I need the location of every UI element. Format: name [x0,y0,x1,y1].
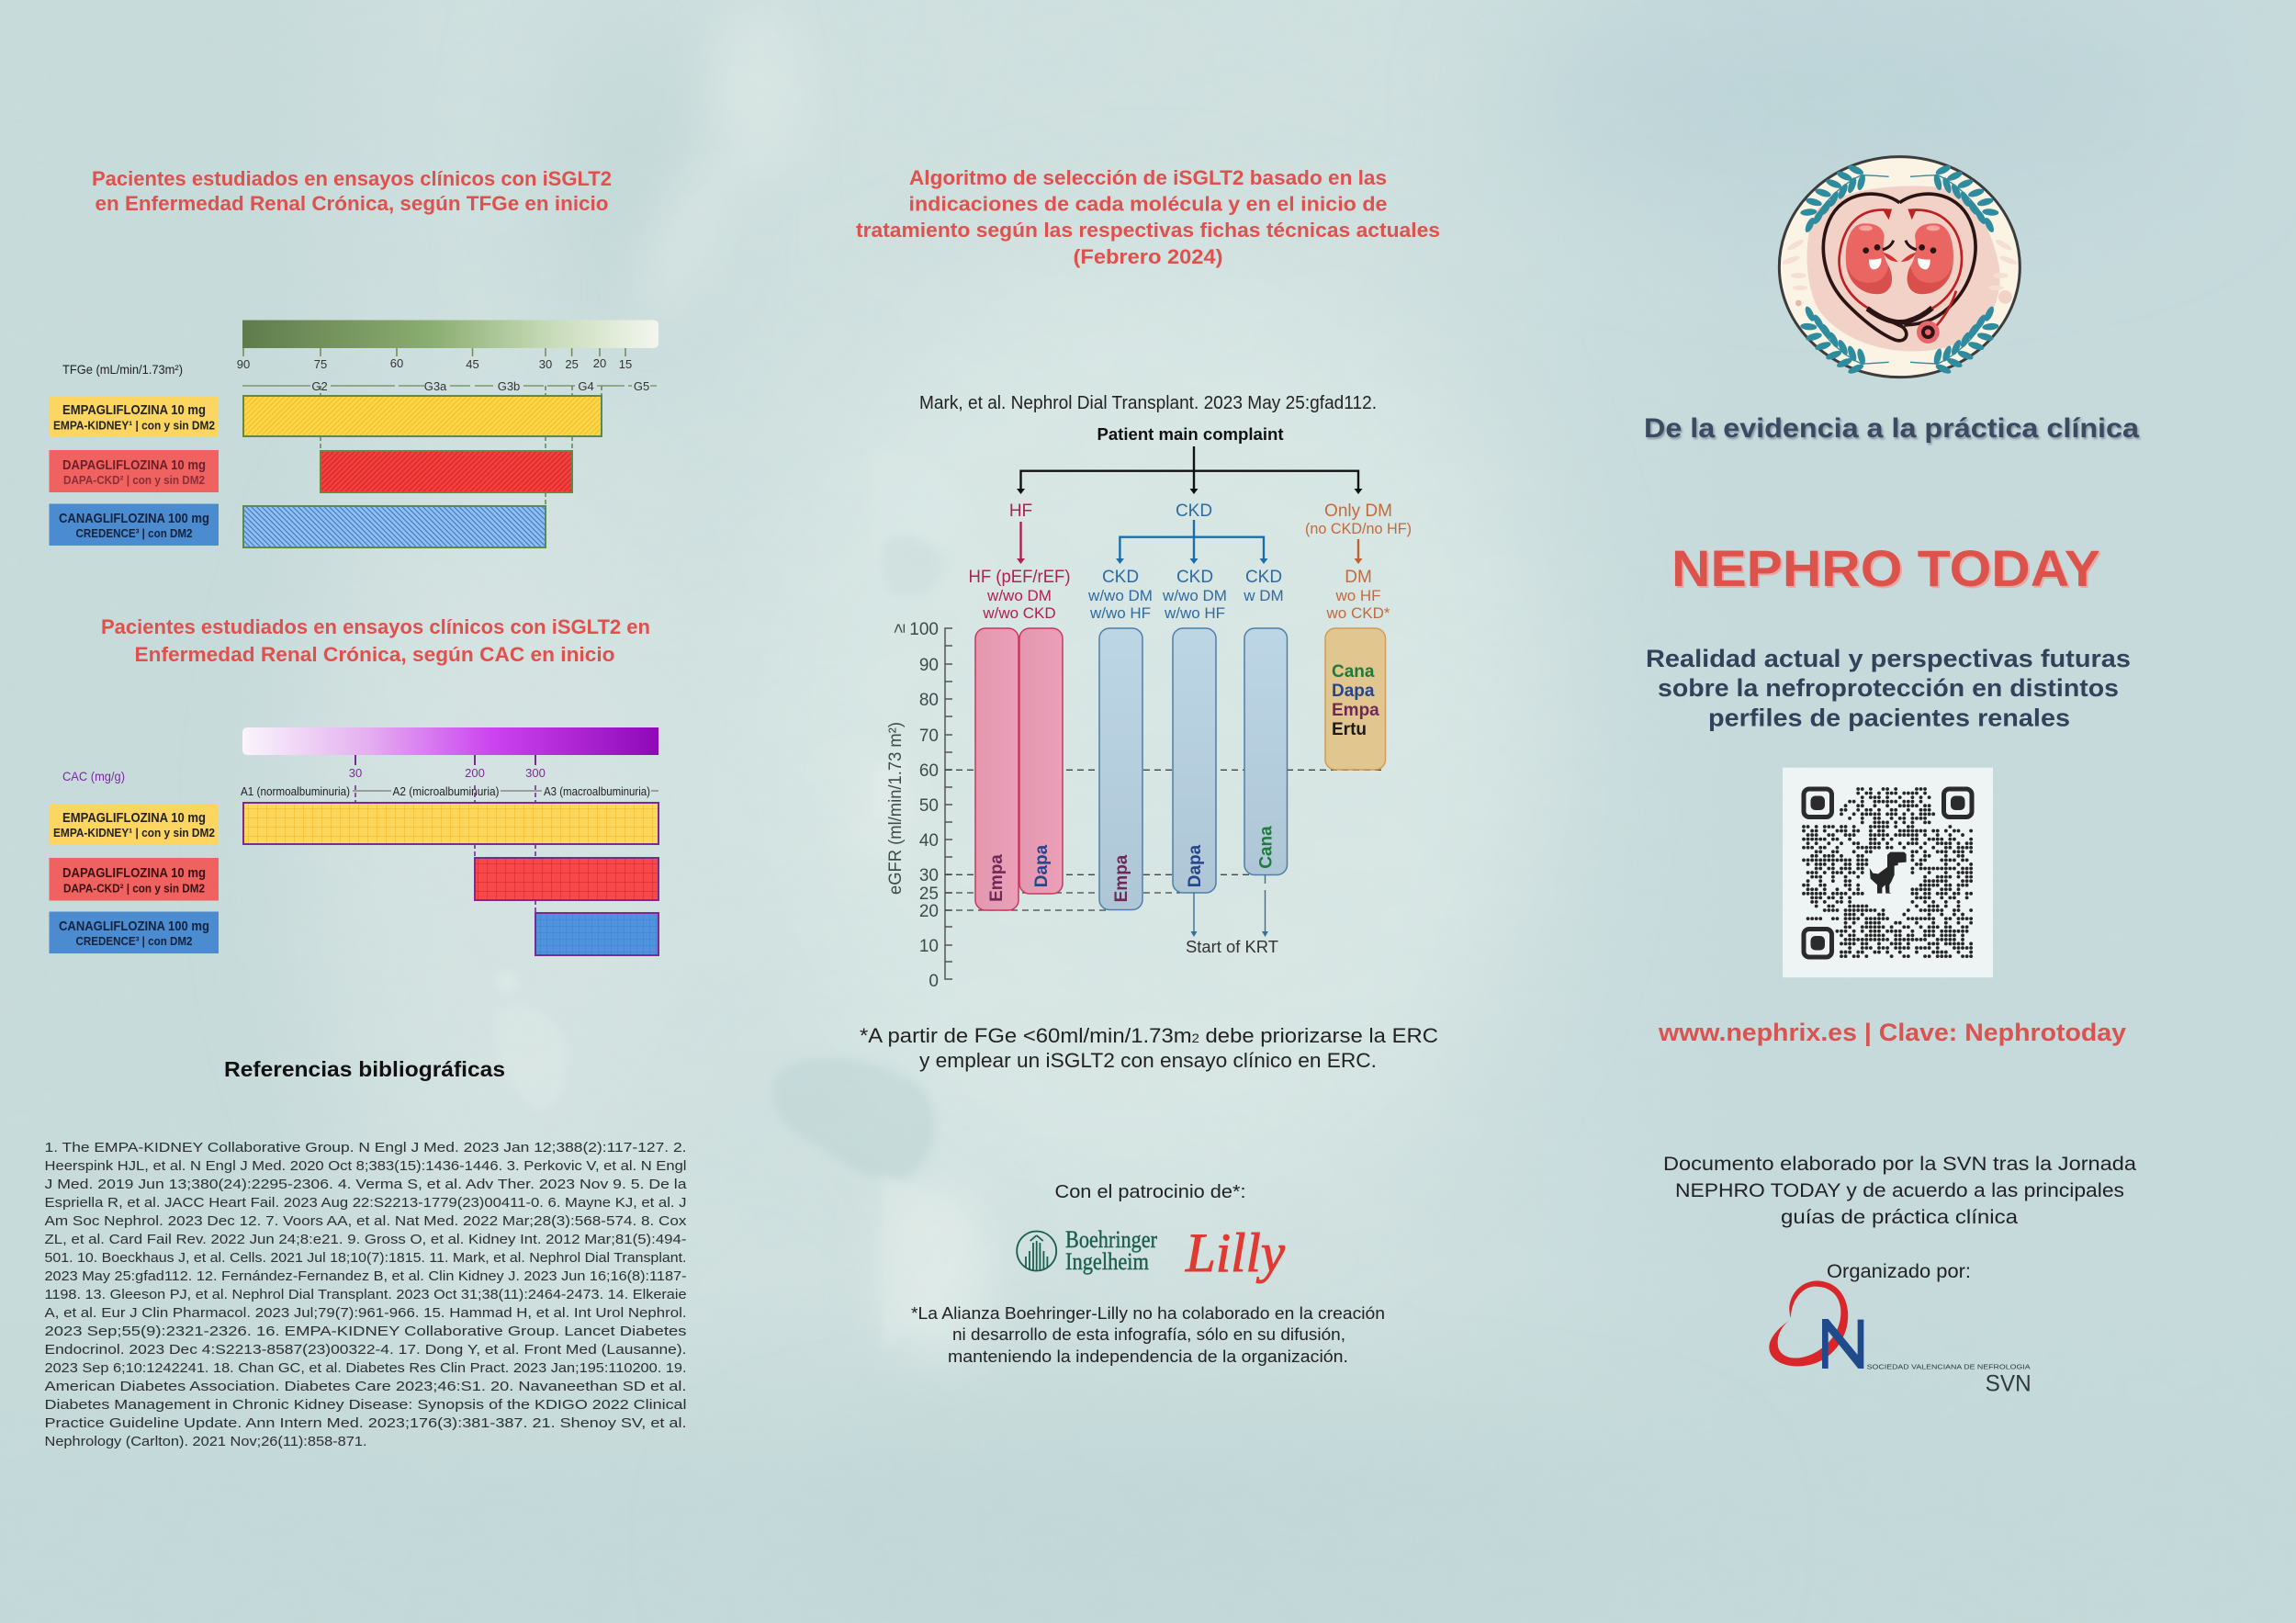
y axis: 25 [919,885,939,904]
title: TFGe chart: Pacientes estudiados en ensayos clínicos con iSGLT2 [92,167,612,190]
branch CKD [1087,502,1284,622]
label: start of KRT: Start of KRT [1186,938,1278,956]
text block: references [44,1140,687,1449]
flowchart: patient main complaint [968,424,1412,622]
heading: references: Referencias bibliográficas [224,1057,505,1081]
G stages: G4 [578,379,594,393]
axis ticks and numbers: 20 [593,356,606,370]
text block: references: 2023 May 25:gfad112. 12. Fernández-Fernandez B, et al. Clin Kidney J. 2023 Jun 16;16(8):1187- [44,1268,687,1284]
branch only DM: DM [1345,568,1372,587]
title: algorithm [856,166,1440,268]
branch CKD: CKD [1245,568,1282,587]
title: TFGe chart [92,167,612,215]
text block: references: 2023 Sep 6;10:1242241. 18. Chan GC, et al. Diabetes Res Clin Pract. 2023 Jan;195:110200. 19. [44,1360,687,1376]
label: empagliflozina: EMPA-KIDNEY¹ | con y sin DM2 [53,826,215,840]
QR dinosaur [1870,852,1907,894]
note: FGe priority: y emplear un iSGLT2 con ensayo clínico en ERC. [919,1049,1377,1072]
label: canagliflozina: CANAGLIFLOZINA 100 mg [59,511,209,526]
axis ticks and numbers: 75 [314,357,327,371]
blue N [1822,1319,1863,1369]
sponsor disclaimer: *La Alianza Boehringer-Lilly no ha colaborado en la creación [911,1303,1385,1323]
axis ticks and numbers: 60 [390,356,403,370]
description: perfiles de pacientes renales [1708,704,2070,731]
text block: references: Diabetes Management in Chronic Kidney Disease: Synopsis of the KDIGO 2022 Clinical [44,1397,687,1413]
branch CKD: w/wo DM [1162,587,1227,604]
root label: Patient main complaint [1097,424,1284,444]
branch CKD: w/wo HF [1089,604,1151,622]
organizer label: Organizado por: [1827,1260,1971,1282]
label: dapagliflozina: DAPA-CKD² | con y sin DM2 [63,473,205,487]
branch HF: HF [1009,502,1032,521]
pink blob [1806,186,2000,351]
QR finder patterns [1804,789,1972,957]
society name: SOCIEDAD VALENCIANA DE NEFROLOGIA [1867,1363,2031,1371]
bar: HF Dapa: Dapa [1032,844,1052,887]
document note: guías de práctica clínica [1781,1206,2018,1228]
title: algorithm: tratamiento según las respectivas fichas técnicas actuales [856,219,1440,242]
G stages [242,379,657,506]
branch only DM [1305,502,1412,622]
axis ticks and numbers: 300 [525,766,546,780]
title: algorithm: (Febrero 2024) [1073,245,1223,268]
A stages: A2 (microalbuminuria) [393,784,500,798]
bar: empagliflozina [243,396,602,436]
title: algorithm: indicaciones de cada molécula y en el inicio de [909,193,1387,215]
bar: CKD Cana: Cana [1256,826,1277,869]
y axis: 40 [919,831,939,851]
text block: references: American Diabetes Association. Diabetes Care 2023;46:S1. 20. Navaneethan SD et al. [44,1379,687,1394]
y axis: 80 [919,691,939,710]
bar: CKD Empa: Empa [1112,854,1131,902]
bar: HF Empa: Empa [987,854,1007,902]
text block: references: Endocrinol. 2023 Dec 4:S2213-8587(23)00322-4. 17. Dong Y, et al. Front Med (Lausanne). [44,1342,687,1358]
bar: DM: Ertu [1332,720,1367,739]
y axis [886,620,952,991]
bar: DM: Cana [1332,662,1375,682]
QR modules [1804,789,1971,956]
badge disc [1779,157,2020,378]
G stages: G2 [311,379,328,393]
text block: references: A, et al. Eur J Clin Pharmacol. 2023 Jul;79(7):961-966. 15. Hammad H, et al. Int Urol Nephrol. [44,1305,687,1321]
arrows to KRT [1190,874,1268,937]
axis ticks and numbers: 90 [237,357,250,371]
faded laurels [1782,238,2018,306]
label: empagliflozina: EMPAGLIFLOZINA 10 mg [62,402,206,418]
title: TFGe chart: en Enfermedad Renal Crónica, según TFGe en inicio [96,192,608,215]
branch only DM: Only DM [1324,502,1392,521]
label: empagliflozina [50,397,219,437]
A stages [241,784,658,913]
axis ticks and numbers: 200 [465,766,485,780]
description: sobre la nefroprotección en distintos [1658,674,2119,702]
bar: dapagliflozina [321,451,572,492]
label: canagliflozina: CANAGLIFLOZINA 100 mg [59,919,209,934]
gradient scale green [242,320,658,348]
logo: SVN [1769,1280,2032,1396]
bar: canagliflozina [243,506,546,547]
logo: kidneys heart stethoscope [1779,157,2020,378]
document note: NEPHRO TODAY y de acuerdo a las principales [1675,1179,2124,1201]
label: empagliflozina: EMPAGLIFLOZINA 10 mg [62,810,206,826]
branch CKD: w DM [1243,587,1284,604]
text block: references: 2023 Sep;55(9):2321-2326. 16. EMPA-KIDNEY Collaborative Group. Lancet Diabetes [44,1324,687,1339]
heart tube [1823,194,1907,341]
text block: references: ZL, et al. Card Fail Rev. 2022 Jun 24;8:e21. 9. Gross O, et al. Kidney Int. 2012 Mar;81(5):494- [44,1232,687,1247]
label: canagliflozina [50,503,219,546]
branch only DM: (no CKD/no HF) [1305,521,1412,537]
branch HF: HF (pEF/rEF) [968,568,1071,587]
description: Realidad actual y perspectivas futuras [1646,645,2131,672]
branch HF: w/wo CKD [982,604,1056,622]
y axis: 10 [919,937,939,956]
threshold dashes [945,770,1385,910]
gradient scale purple [242,727,658,755]
axis label: CAC (mg/g) [62,769,125,783]
chart: CAC bars [50,727,658,955]
sponsor disclaimer: ni desarrollo de esta infografía, sólo en su difusión, [952,1324,1345,1344]
axis ticks and numbers [237,348,632,371]
text block: references: Heerspink HJL, et al. N Engl J Med. 2020 Oct 8;383(15):1436-1446. 3. Perkovic V, et al. N Engl [44,1158,686,1174]
label: dapagliflozina: DAPA-CKD² | con y sin DM2 [63,882,205,895]
title: CAC chart: Enfermedad Renal Crónica, según CAC en inicio [134,643,615,666]
website and key: www.nephrix.es | Clave: Nephrotoday [1658,1019,2126,1046]
logo: Boehringer Ingelheim [1017,1226,1157,1275]
axis label: TFGe (mL/min/1.73m²) [62,362,183,377]
sponsor label: Con el patrocinio de*: [1054,1182,1245,1202]
description [1646,645,2131,731]
chest piece [1917,321,1940,344]
kidney left [1846,223,1898,294]
branch CKD: CKD [1102,568,1139,587]
bar: DM: Dapa [1332,682,1375,701]
bar: dapagliflozina [475,858,658,900]
red tube [1840,209,1962,329]
sponsor disclaimer: manteniendo la independencia de la organización. [948,1347,1348,1366]
A stages: A3 (macroalbuminuria) [544,784,650,798]
G stages: G5 [634,379,649,393]
branch CKD: CKD [1176,502,1212,521]
branch CKD: CKD [1176,568,1213,587]
text block: references: Espriella R, et al. JACC Heart Fail. 2023 Aug 22:S2213-1779(23)00411-0. 6. Mayne KJ, et al. J [44,1195,687,1211]
text block: references: 1. The EMPA-KIDNEY Collaborative Group. N Engl J Med. 2023 Jan 12;388(2):117-127. 2. [44,1140,686,1155]
label: empagliflozina [50,804,219,845]
kidney right [1901,223,1953,294]
G stages: G3b [498,379,520,393]
branch HF: w/wo DM [986,587,1052,604]
logo: Lilly: Lilly [1185,1223,1285,1283]
axis ticks and numbers [349,755,546,780]
note: FGe priority [860,1024,1438,1072]
main title: NEPHRO TODAY [1671,539,2100,597]
QR code [1783,768,1993,977]
axis ticks and numbers: 45 [466,357,479,371]
document note [1663,1153,2136,1228]
document note: Documento elaborado por la SVN tras la Jornada [1663,1153,2136,1175]
watercolor stains with crisp edges [494,448,974,1350]
chart: TFGe bars [50,320,658,547]
y axis: ≥ [890,624,909,633]
label: dapagliflozina: DAPAGLIFLOZINA 10 mg [62,865,206,881]
y axis: 30 [919,866,939,885]
label: canagliflozina: CREDENCE³ | con DM2 [75,934,193,948]
label: dapagliflozina [50,858,219,900]
y axis: 50 [919,796,939,816]
text block: references: 1198. 13. Gleeson PJ, et al. Nephrol Dial Transplant. 2023 Oct 31;38(11):2464-2473. 14. Elkeraie [44,1287,687,1302]
bar: empagliflozina [243,803,658,844]
bar: HF Empa [975,628,1019,910]
bar: CKD Empa [1099,628,1142,909]
label: dapagliflozina: DAPAGLIFLOZINA 10 mg [62,457,206,473]
label: empagliflozina: EMPA-KIDNEY¹ | con y sin DM2 [53,419,215,432]
chart: eGFR thresholds [886,620,1385,991]
bar: HF Dapa [1019,628,1063,894]
logo: Boehringer Ingelheim: Boehringer [1065,1226,1157,1253]
bar: CKD Dapa [1173,628,1216,893]
title: algorithm: Algoritmo de selección de iSGLT2 basado en las [909,166,1387,189]
text block: references: 501. 10. Boeckhaus J, et al. Cells. 2021 Jul 18;10(7):1815. 11. Mark, et al. Nephrol Dial Transplant. [44,1250,687,1266]
branch only DM: wo CKD* [1326,604,1390,622]
A stages: A1 (normoalbuminuria) [241,784,350,798]
logo: Boehringer Ingelheim: Ingelheim [1065,1248,1149,1275]
y axis: 70 [919,727,939,746]
text block: references: J Med. 2019 Jun 13;380(24):2295-2306. 4. Verma S, et al. Adv Ther. 2023 Nov 9. 5. De la [44,1177,687,1192]
label: canagliflozina [50,911,219,953]
y axis: 0 [929,972,939,991]
text block: references: Nephrology (Carlton). 2021 Nov;26(11):858-871. [44,1434,367,1449]
axis ticks and numbers: 15 [619,357,632,371]
branch HF [968,502,1071,622]
label: dapagliflozina [50,450,219,492]
title: CAC chart: Pacientes estudiados en ensayos clínicos con iSGLT2 en [101,615,650,638]
bar: DM: Empa [1332,701,1379,720]
black arrows [1017,446,1363,494]
label: canagliflozina: CREDENCE³ | con DM2 [75,526,193,540]
axis ticks and numbers: 25 [565,357,579,371]
SVN initials: SVN [1986,1371,2032,1396]
branch CKD: w/wo HF [1164,604,1225,622]
red heart swoosh [1769,1280,1848,1367]
y axis: 100 [909,620,939,639]
axis ticks and numbers: 30 [349,766,362,780]
bar: canagliflozina [535,913,658,955]
bar: DM [1325,628,1385,770]
subtitle: de la evidencia: De la evidencia a la práctica clínica [1644,413,2139,444]
note: FGe priority: *A partir de FGe <60ml/min/1.73m 2 debe priorizarse la ERC [860,1024,1438,1047]
sponsor disclaimer [911,1303,1385,1366]
axis ticks and numbers: 30 [539,357,552,371]
title: CAC chart [101,615,650,666]
text block: references: Am Soc Nephrol. 2023 Dec 12. 7. Voors AA, et al. Nat Med. 2022 Mar;28(3):568-574. 8. Cox [44,1213,687,1229]
text block: references: Practice Guideline Update. Ann Intern Med. 2023;176(3):381-387. 21. Shenoy SV, et al. [44,1415,687,1431]
G stages: G3a [424,379,447,393]
bar: CKD Dapa: Dapa [1186,844,1205,887]
y axis: eGFR (ml/min/1.73 m²) [886,722,906,895]
citation: Mark, et al. Nephrol Dial Transplant. 2023 May 25:gfad112. [919,393,1377,413]
branch only DM: wo HF [1334,587,1381,604]
y axis: 60 [919,761,939,781]
laurel sprays [1800,163,1999,376]
y axis: 20 [919,902,939,921]
bar: CKD Cana [1244,628,1288,874]
branch CKD: w/wo DM [1087,587,1153,604]
y axis: 90 [919,656,939,675]
